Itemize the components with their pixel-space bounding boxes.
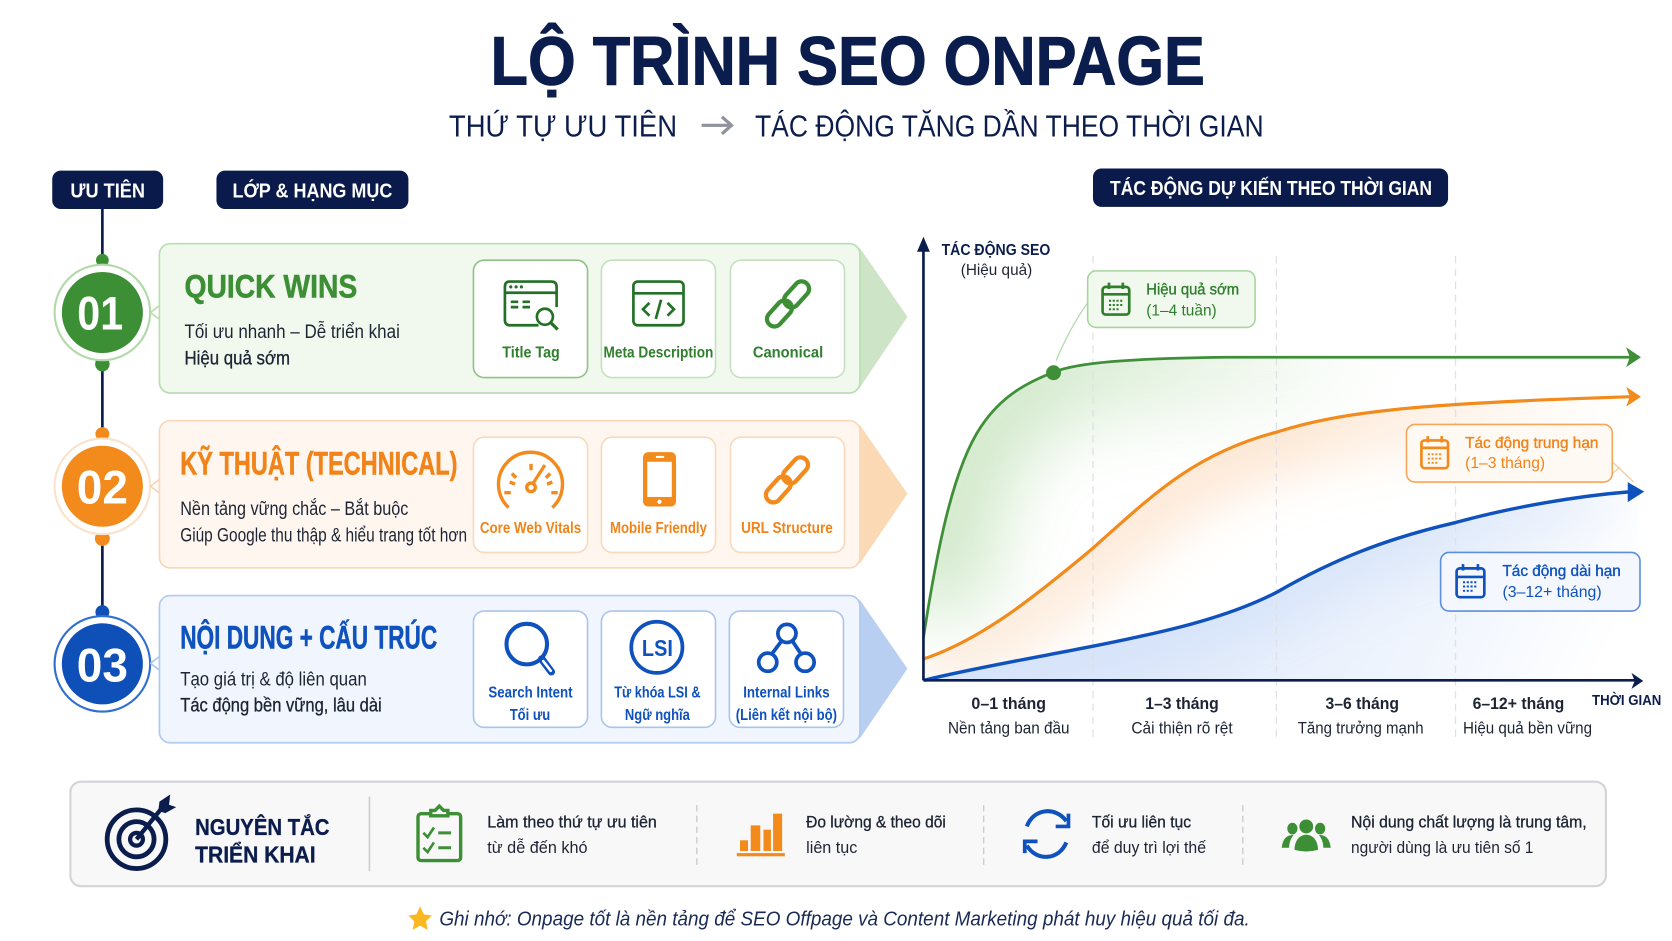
curve: content xyxy=(923,483,1643,680)
callout: mid xyxy=(1406,424,1634,482)
text: content description xyxy=(180,670,382,716)
period: 6-12: 6–12+ tháng xyxy=(1473,694,1564,713)
period: 1-3 xyxy=(1131,694,1233,738)
card: core web vitals xyxy=(473,437,588,552)
subtitle: TÁC ĐỘNG TĂNG DẦN THEO THỜI GIAN xyxy=(755,109,1264,144)
heading: quick wins: QUICK WINS xyxy=(184,269,357,305)
card: search intent xyxy=(473,611,588,727)
callout: long: Tác động dài hạn xyxy=(1502,563,1621,580)
period: 6-12 xyxy=(1463,694,1592,738)
card: title tag xyxy=(473,260,588,378)
heading: principles: TRIỂN KHAI xyxy=(195,841,316,868)
point: early impact xyxy=(1046,365,1061,380)
badge 03 xyxy=(55,605,159,712)
card: internal links: (Liên kết nội bộ) xyxy=(736,707,837,724)
text: quick wins description: Hiệu quả sớm xyxy=(184,349,290,370)
card: lsi: LSI xyxy=(642,635,673,661)
arrow: subtitle xyxy=(702,117,732,134)
axis title: x: THỜI GIAN xyxy=(1592,691,1661,709)
header: lớp & hạng mục: LỚP & HẠNG MỤC xyxy=(232,178,393,202)
axis title: y: (Hiệu quả) xyxy=(961,262,1032,279)
icon: target xyxy=(107,796,175,869)
card: lsi: Ngữ nghĩa xyxy=(625,707,690,724)
card: canonical xyxy=(730,260,845,378)
curve: quick wins xyxy=(923,349,1640,638)
period: 3-6: 3–6 tháng xyxy=(1325,694,1399,713)
text: principle 4 xyxy=(1351,813,1587,857)
text: principle 2: liên tục xyxy=(806,838,858,857)
text: quick wins description xyxy=(184,321,400,370)
text: technical description: Giúp Google thu thập & hiểu trang tốt hơn xyxy=(180,526,467,547)
curve: technical xyxy=(923,388,1640,659)
badge 02 xyxy=(55,427,159,546)
area: green xyxy=(930,357,1386,608)
icon: refresh xyxy=(1025,811,1068,857)
badge 01: 01 xyxy=(77,288,123,340)
card: mobile friendly xyxy=(601,437,716,552)
card: meta description: Meta Description xyxy=(604,344,713,361)
text: principle 1: Làm theo thứ tự ưu tiên xyxy=(487,813,657,832)
text: principle 4: người dùng là ưu tiên số 1 xyxy=(1351,838,1533,857)
callout: long: (3–12+ tháng) xyxy=(1502,584,1602,601)
card: url structure xyxy=(730,437,845,552)
text: content description: Tạo giá trị & độ liên quan xyxy=(180,670,367,691)
area: orange xyxy=(923,397,1638,659)
card: internal links: Internal Links xyxy=(743,684,830,701)
card: lsi: Từ khóa LSI & xyxy=(614,684,701,701)
card: meta description xyxy=(601,260,716,378)
text: principle 2: Đo lường & theo dõi xyxy=(806,813,946,832)
header: tác động dự kiến xyxy=(1093,169,1448,207)
card: title tag: Title Tag xyxy=(502,344,560,361)
callout: early: Hiệu quả sớm xyxy=(1146,281,1239,298)
timeline line xyxy=(101,209,104,629)
text: principle 1: từ dễ đến khó xyxy=(487,838,588,857)
card: mobile friendly: Mobile Friendly xyxy=(610,520,707,537)
icon: people xyxy=(1282,820,1331,851)
text: principle 2 xyxy=(806,813,946,857)
card: search intent: Search Intent xyxy=(488,684,573,701)
axis title: y xyxy=(942,240,1050,279)
badge 03: 03 xyxy=(77,639,128,691)
card: search intent: Tối ưu xyxy=(510,707,550,724)
card: internal links xyxy=(729,611,843,727)
period: 3-6: Tăng trưởng mạnh xyxy=(1298,719,1424,738)
icon: clipboard xyxy=(418,806,461,861)
footer note: Ghi nhớ: Onpage tốt là nền tảng để SEO Offpage và Content Marketing phát huy hiệu quả tối đa. xyxy=(439,909,1250,931)
panel: implementation principles xyxy=(70,782,1606,886)
card: canonical: Canonical xyxy=(753,344,823,361)
text: technical description xyxy=(180,498,467,547)
panel: technical xyxy=(159,421,907,568)
header: tác động dự kiến: TÁC ĐỘNG DỰ KIẾN THEO THỜI GIAN xyxy=(1110,176,1432,200)
text: content description: Tác động bền vững, lâu dài xyxy=(180,695,382,716)
period: 6-12: Hiệu quả bền vững xyxy=(1463,719,1592,738)
title: LỘ TRÌNH SEO ONPAGE xyxy=(491,22,1205,99)
subtitle xyxy=(449,109,1264,144)
period: 1-3: Cải thiện rõ rệt xyxy=(1131,719,1233,738)
period: 0-1 xyxy=(948,694,1070,738)
line chart xyxy=(917,237,1661,738)
period: 1-3: 1–3 tháng xyxy=(1145,694,1219,713)
header: ưu tiên xyxy=(52,171,163,209)
text: quick wins description: Tối ưu nhanh – Dễ triển khai xyxy=(184,321,400,343)
header: lớp & hạng mục xyxy=(216,171,408,209)
panel: quick wins xyxy=(159,244,907,393)
callout: early xyxy=(1056,271,1255,360)
callout: mid: (1–3 tháng) xyxy=(1465,455,1545,472)
period: 0-1: Nền tảng ban đầu xyxy=(948,719,1070,738)
card: url structure: URL Structure xyxy=(741,520,833,537)
heading: content: NỘI DUNG + CẤU TRÚC xyxy=(180,619,437,655)
heading: technical: KỸ THUẬT (TECHNICAL) xyxy=(180,446,457,482)
axes xyxy=(917,237,1643,689)
badge 01 xyxy=(55,254,159,371)
text: principle 3: Tối ưu liên tục xyxy=(1092,813,1192,832)
subtitle: THỨ TỰ ƯU TIÊN xyxy=(449,109,677,144)
text: technical description: Nền tảng vững chắc – Bắt buộc xyxy=(180,498,409,520)
heading: principles: NGUYÊN TẮC xyxy=(195,813,330,840)
axis title: y: TÁC ĐỘNG SEO xyxy=(942,240,1050,259)
icon: star xyxy=(408,906,432,930)
heading: principles xyxy=(195,813,330,868)
text: principle 4: Nội dung chất lượng là trung tâm, xyxy=(1351,813,1587,832)
text: principle 3 xyxy=(1092,813,1206,857)
period: 3-6 xyxy=(1298,694,1424,738)
card: lsi xyxy=(601,611,716,727)
area: blue xyxy=(938,494,1624,679)
badge 02: 02 xyxy=(77,461,128,513)
icon: bars xyxy=(737,814,785,856)
card: core web vitals: Core Web Vitals xyxy=(480,520,581,537)
panel: content xyxy=(159,596,907,743)
period: 0-1: 0–1 tháng xyxy=(971,694,1046,713)
text: principle 1 xyxy=(487,813,657,857)
callout: long xyxy=(1441,552,1640,611)
text: principle 3: để duy trì lợi thế xyxy=(1092,838,1206,857)
header: ưu tiên: ƯU TIÊN xyxy=(70,178,145,202)
callout: early: (1–4 tuần) xyxy=(1146,303,1217,320)
callout: mid: Tác động trung hạn xyxy=(1465,435,1598,452)
